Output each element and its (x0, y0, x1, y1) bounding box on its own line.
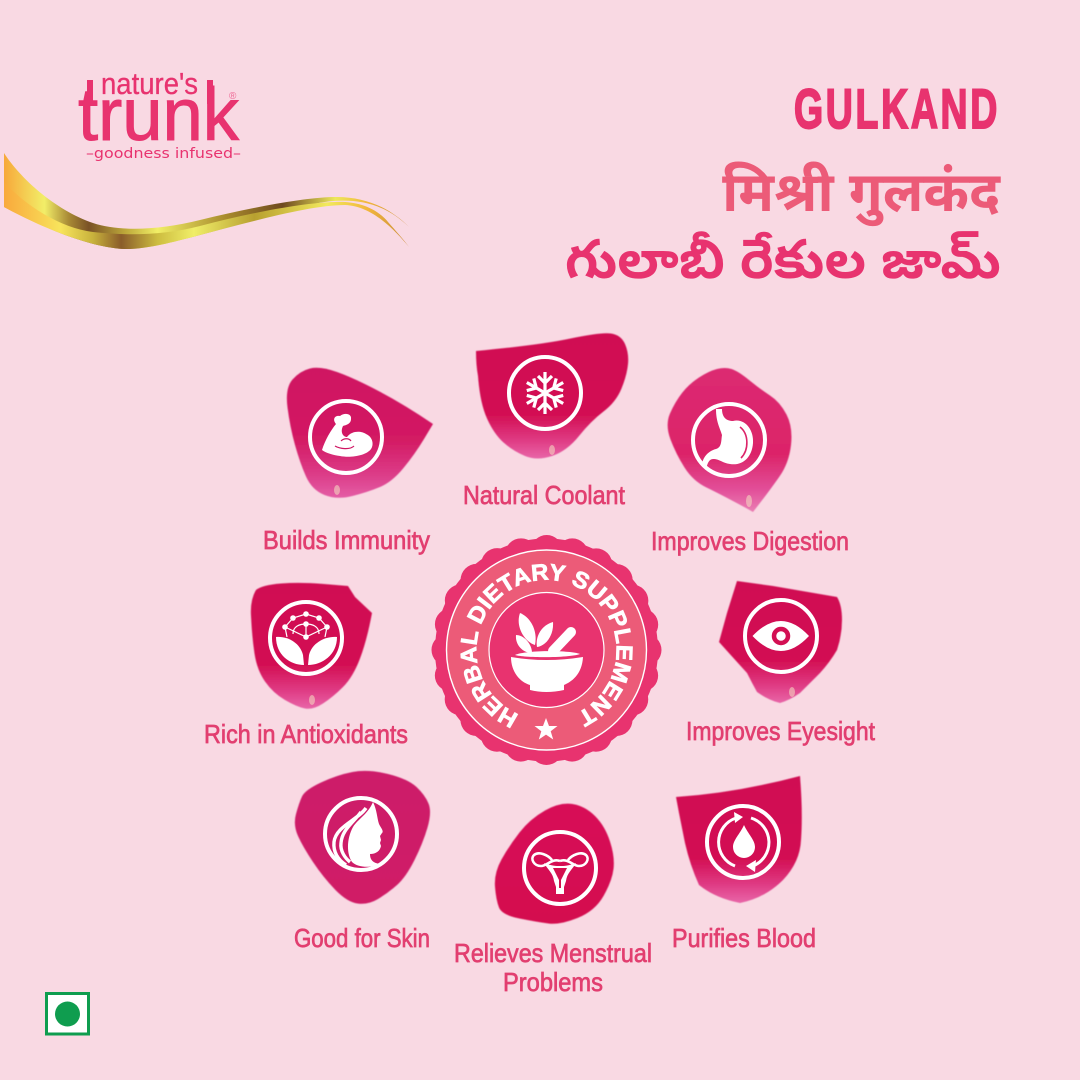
icon ring (325, 798, 397, 870)
logo registered mark: ® (229, 91, 237, 102)
label line 1: Relieves Menstrual (454, 938, 652, 968)
label: Purifies Blood (672, 923, 816, 953)
label: Builds Immunity (263, 525, 430, 555)
petal (287, 368, 433, 498)
benefit: Relieves Menstrual Problems (454, 804, 652, 997)
icon: eye (752, 621, 809, 651)
icon ring (745, 600, 817, 672)
benefit: Improves Digestion (651, 368, 849, 556)
petal (476, 333, 628, 458)
petal (719, 581, 842, 703)
petal (668, 368, 791, 512)
icon ring (693, 404, 765, 476)
icon ring (310, 401, 382, 473)
icon ring (524, 832, 596, 904)
petal (295, 771, 430, 904)
label: Good for Skin (294, 923, 430, 953)
logo: nature's trunk (78, 66, 241, 162)
badge centre (489, 592, 604, 708)
label line 2: Problems (503, 967, 603, 997)
benefit: Builds Immunity (263, 368, 433, 555)
logo word: trunk: trunk (78, 73, 240, 156)
label: Improves Eyesight (686, 716, 876, 746)
badge: herbal dietary supplement (432, 535, 662, 765)
icon: flexed arm (322, 414, 373, 457)
title: Telugu name: గులాబీ రేకుల జామ్ (565, 230, 1001, 290)
label: Rich in Antioxidants (204, 719, 408, 749)
icon: blood drop with cycle arrows (719, 812, 769, 872)
badge scalloped edge (435, 538, 658, 762)
icon ring (707, 806, 779, 878)
badge curved text: HERBAL DIETARY SUPPLEMENT (460, 564, 633, 728)
gold swoosh (4, 153, 409, 249)
icon: woman's profile with flowing hair (334, 802, 383, 867)
benefit: Good for Skin (294, 771, 430, 953)
petal (251, 583, 372, 709)
icon: snowflake (523, 372, 567, 414)
icon: lotus with antioxidant network (276, 611, 337, 665)
label: Improves Digestion (651, 526, 849, 556)
label: Natural Coolant (463, 480, 626, 510)
icon: stomach (702, 409, 753, 470)
badge star (534, 718, 558, 740)
icon ring (509, 357, 581, 429)
benefit: Improves Eyesight (686, 581, 876, 746)
badge ring (446, 550, 646, 750)
icon: mortar, pestle and herbs (511, 613, 583, 692)
benefit: Natural Coolant (463, 333, 628, 510)
label (454, 938, 652, 997)
petal (495, 804, 614, 924)
vegetarian mark (46, 994, 88, 1034)
icon: uterus (532, 853, 588, 894)
benefit: Rich in Antioxidants (204, 583, 408, 749)
petal (676, 776, 802, 903)
title: Hindi name: मिश्री गुलकंद (722, 161, 1001, 227)
icon ring (270, 602, 342, 674)
logo tagline: –goodness infused– (86, 146, 241, 162)
logo word: nature's: nature's (101, 66, 198, 101)
benefit: Purifies Blood (672, 776, 816, 953)
